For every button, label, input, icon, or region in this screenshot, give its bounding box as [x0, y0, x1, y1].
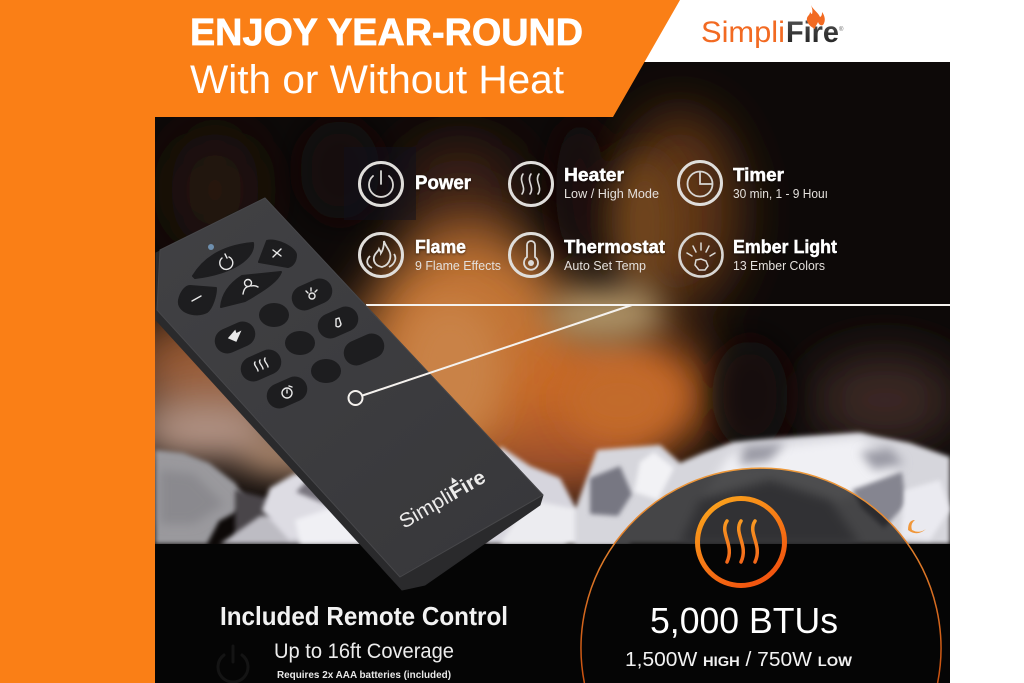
background photo: fireplace flames and embers — [120, 62, 960, 683]
feature: Flame: Flame — [415, 236, 466, 257]
faint tinted panel behind power icon — [344, 147, 416, 220]
logo: SimpliFire: ® — [839, 26, 844, 33]
callout marker and line — [348, 305, 632, 405]
stat: BTUs: 1,500W HIGH / 750W LOW — [625, 649, 853, 671]
ember stones — [155, 433, 950, 544]
remote brand mark — [394, 463, 490, 533]
feature: Thermostat — [510, 234, 665, 276]
title — [190, 12, 583, 102]
remote body side — [156, 198, 543, 590]
buttons: arcs — [179, 240, 296, 314]
stat: BTUs: 5,000 BTUs — [650, 600, 838, 641]
caption: remote control: Requires 2x AAA batteries (included) — [277, 669, 451, 681]
stat: BTUs — [625, 600, 853, 671]
feature: Heater — [510, 162, 659, 206]
feature: Heater: Low / High Mode — [564, 186, 659, 201]
status LED — [208, 244, 214, 250]
feature: Power — [360, 162, 472, 206]
big circle outline — [581, 468, 941, 683]
feature: Flame — [360, 234, 501, 276]
feature: Timer: 30 min, 1 - 9 Houı — [733, 186, 828, 201]
logo: SimpliFire: Simpli — [701, 16, 785, 49]
feature: Thermostat: Auto Set Temp — [564, 258, 646, 273]
feature: Ember Light: Ember Light — [733, 236, 837, 257]
orange header banner — [0, 0, 680, 683]
feature: Flame: 9 Flame Effects — [415, 258, 501, 273]
logo: SimpliFire — [701, 5, 844, 49]
dark circle overlay — [615, 468, 907, 544]
feature: Ember Light: 13 Ember Colors — [733, 258, 825, 273]
title: With or Without Heat — [190, 58, 564, 102]
caption: remote control — [220, 601, 508, 681]
buttons: pills — [211, 275, 388, 412]
remote brand mark: Fire — [446, 466, 490, 504]
feature: Power: Power — [415, 173, 472, 194]
feature: Ember Light — [680, 234, 837, 276]
feature: Thermostat: Thermostat — [564, 236, 665, 257]
remote top face — [157, 198, 543, 577]
logo: SimpliFire: Fire — [786, 16, 839, 49]
feature: Timer: Timer — [733, 164, 784, 185]
icon: heat ring — [698, 498, 784, 586]
caption: remote control: Up to 16ft Coverage — [274, 640, 454, 663]
remote brand mark: Simpli — [396, 485, 457, 533]
ghost power icon — [218, 646, 248, 682]
title: ENJOY YEAR-ROUND — [190, 12, 583, 54]
button glyphs — [192, 249, 341, 398]
feature: Heater: Heater — [564, 164, 624, 185]
callout line horizontal — [366, 304, 950, 306]
remote control — [156, 198, 632, 590]
black lower band — [155, 544, 950, 557]
caption: remote control: Included Remote Control — [220, 601, 508, 631]
feature: Timer — [678, 162, 828, 204]
